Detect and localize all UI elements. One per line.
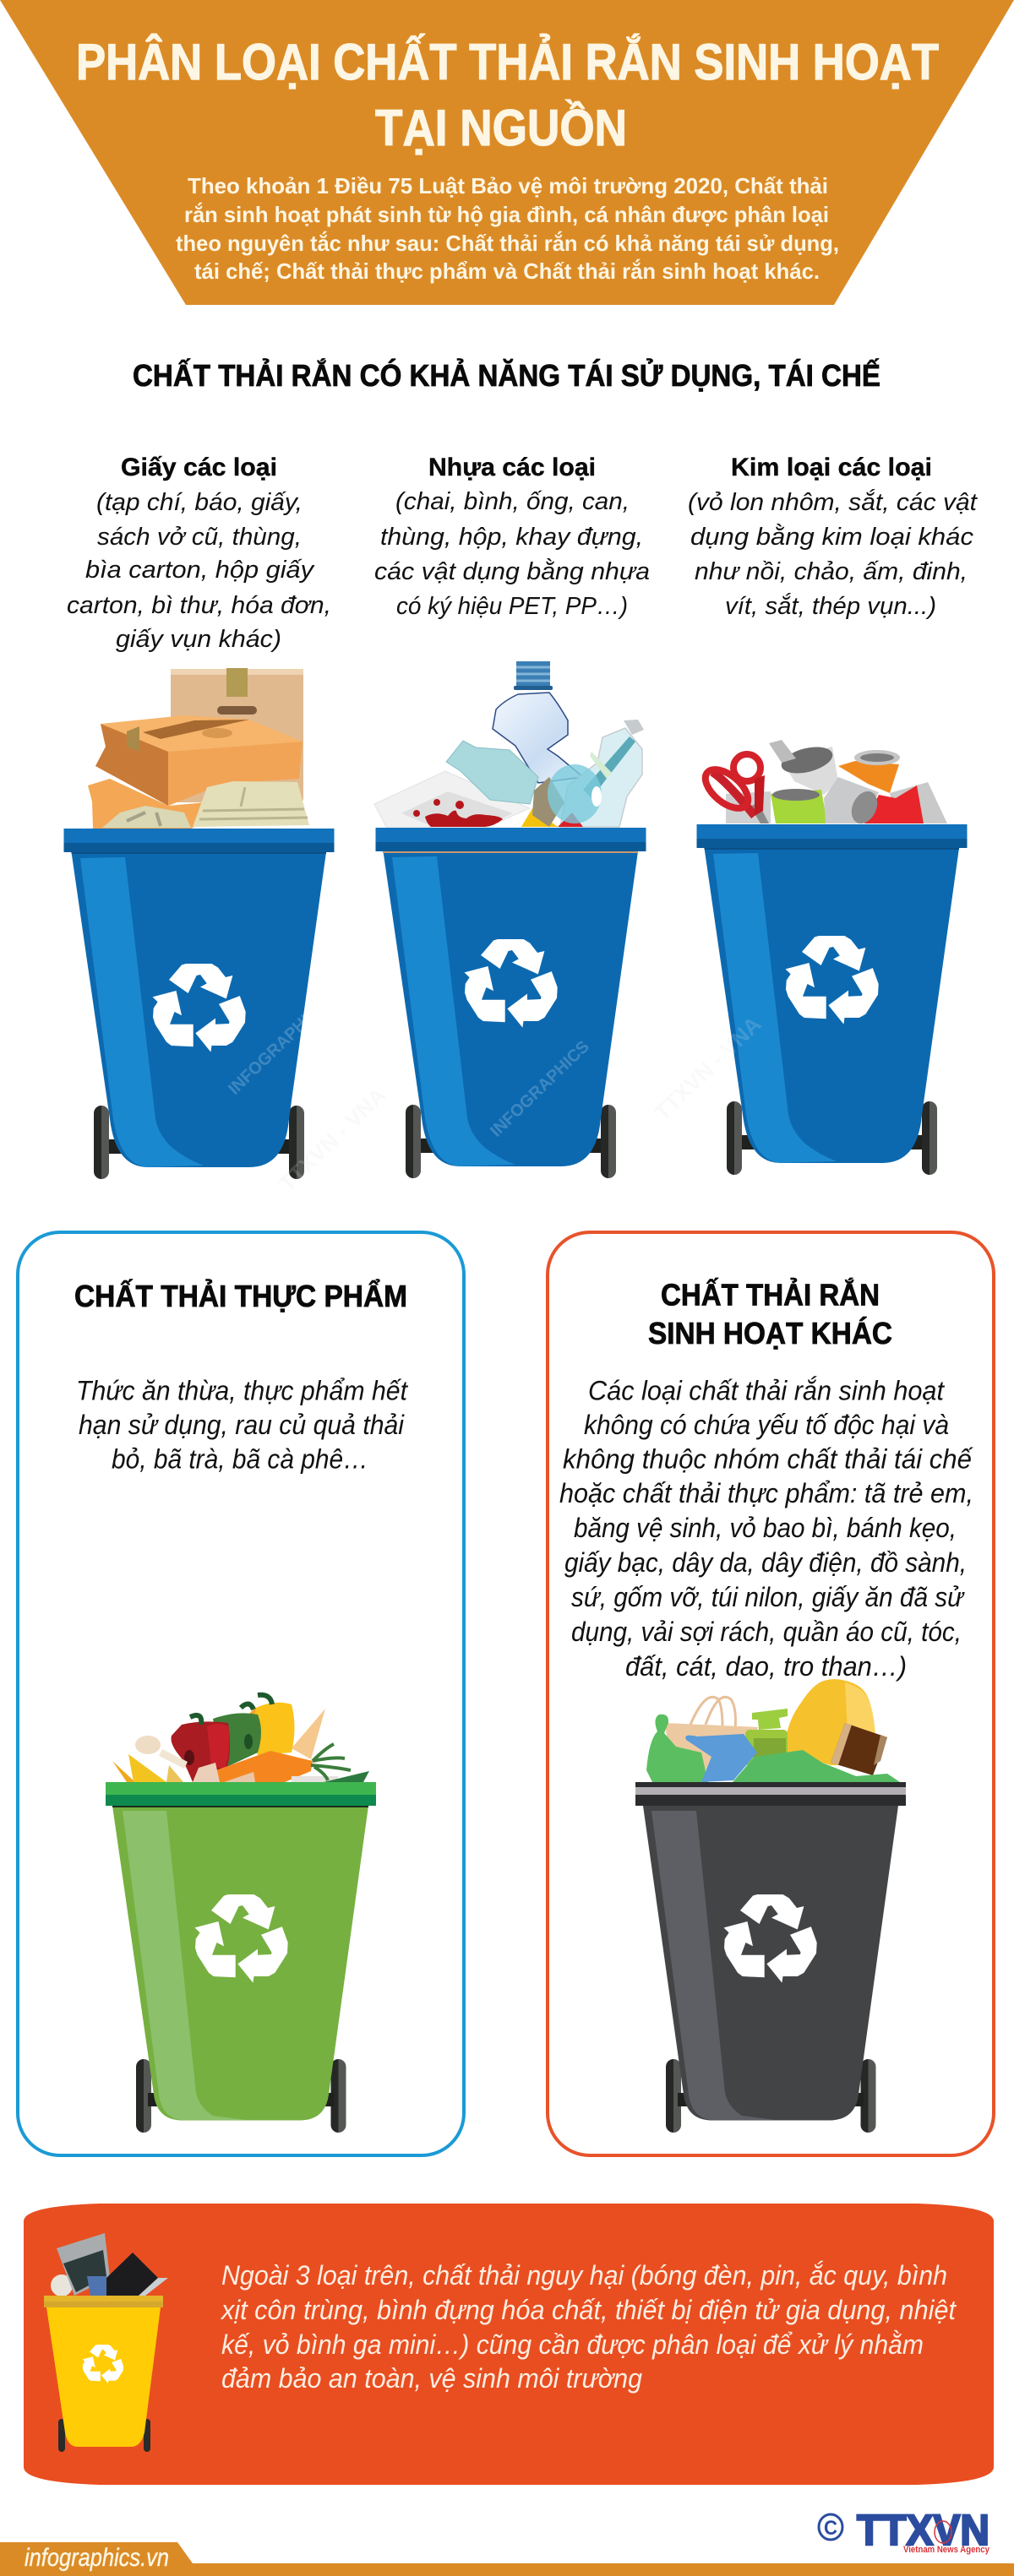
icon: mixed household waste [646, 1679, 900, 1782]
logo: TTXVN: Vietnam News Agency [903, 2545, 990, 2555]
text block: paper: (tạp chí, báo, giấy, [96, 489, 303, 516]
text block: metal: dụng bằng kim loại khác [690, 523, 974, 551]
text block: hazardous waste: Ngoài 3 loại trên, chất thải nguy hại (bóng đèn, pin, ắc quy, bình [221, 2260, 947, 2291]
text block: hazardous waste: xịt côn trùng, bình đựng hóa chất, thiết bị điện tử gia dụng, nhiệt [220, 2295, 957, 2325]
text block: paper: bìa carton, hộp giấy [85, 557, 315, 584]
text block: food waste: Thức ăn thừa, thực phẩm hết [76, 1375, 408, 1405]
intro paragraph: rắn sinh hoạt phát sinh từ hộ gia đình, cá nhân được phân loại [184, 202, 829, 227]
text block: food waste: hạn sử dụng, rau củ quả thải [79, 1410, 405, 1440]
icon: food scraps [112, 1695, 369, 1782]
text block: other solid waste: hoặc chất thải thực phẩm: tã trẻ em, [559, 1478, 973, 1508]
icon: recycle symbol [152, 964, 246, 1052]
icon: electronic waste [51, 2233, 168, 2296]
text block: plastic: có ký hiệu PET, PP…) [396, 593, 628, 620]
text block: plastic: thùng, hộp, khay đựng, [380, 524, 643, 551]
text block: other solid waste: băng vệ sinh, vỏ bao bì, bánh kẹo, [574, 1513, 957, 1543]
text block: other solid waste [559, 1375, 973, 1682]
icon: plastic waste pile [374, 661, 644, 827]
text block: metal: vít, sắt, thép vụn...) [725, 592, 936, 620]
text block: metal: Kim loại các loại [731, 454, 932, 481]
watermark: TTXVN - VNA [274, 1082, 391, 1196]
text block: metal [688, 454, 979, 620]
panel: hazardous waste [24, 2204, 994, 2485]
text block: paper: Giấy các loại [121, 454, 277, 481]
text block: plastic [374, 454, 650, 620]
heading: other solid waste: CHẤT THẢI RẮN [661, 1277, 880, 1312]
watermark: TTXVN - VNA [649, 1011, 766, 1125]
text block: other solid waste: không thuộc nhóm chất thải tái chế [563, 1444, 973, 1475]
footer site name: infographics.vn [25, 2544, 169, 2572]
text block: other solid waste: Các loại chất thải rắn sinh hoạt [588, 1375, 945, 1405]
footer bar [0, 2542, 1014, 2576]
bin: paper [64, 829, 335, 1179]
title [76, 34, 939, 156]
text block: plastic: (chai, bình, ống, can, [395, 488, 630, 515]
text block: other solid waste: sứ, gốm vỡ, túi nilon, giấy ăn đã sử [571, 1582, 966, 1612]
text block: other solid waste: dụng, vải sợi rách, quần áo cũ, tóc, [571, 1617, 962, 1647]
icon: metal waste pile [699, 740, 947, 828]
text block: metal: (vỏ lon nhôm, sắt, các vật [688, 488, 979, 516]
text block: other solid waste: không có chứa yếu tố độc hại và [584, 1410, 949, 1440]
bin: plastic: INFOGRAPHICS [487, 1037, 593, 1141]
text block: paper: carton, bì thư, hóa đơn, [67, 592, 331, 619]
icon: recycle symbol [723, 1894, 817, 1983]
text block: paper: sách vở cũ, thùng, [97, 524, 302, 551]
heading: food waste: CHẤT THẢI THỰC PHẨM [74, 1278, 407, 1313]
bin: metal [696, 824, 967, 1175]
intro paragraph: tái chế; Chất thải thực phẩm và Chất thải rắn sinh hoạt khác. [194, 258, 820, 284]
bin: hazardous waste, yellow [44, 2296, 163, 2452]
icon: recycle symbol [465, 939, 558, 1028]
bin: food waste, green [106, 1782, 376, 2133]
icon: recycle symbol [194, 1894, 288, 1983]
text block: food waste: bỏ, bã trà, bã cà phê… [112, 1444, 368, 1475]
title: TẠI NGUỒN [375, 100, 627, 156]
text block: hazardous waste: đảm bảo an toàn, vệ sinh môi trường [221, 2363, 642, 2394]
bin: other solid waste, black [635, 1782, 906, 2133]
panel: food waste [18, 1232, 464, 2155]
bin: paper: INFOGRAPHICS [225, 995, 331, 1099]
intro paragraph: theo nguyên tắc như sau: Chất thải rắn có khả năng tái sử dụng, [176, 231, 839, 256]
heading: other solid waste: SINH HOẠT KHÁC [648, 1316, 892, 1350]
logo: TTXVN: TTXVN [857, 2506, 989, 2554]
section heading: recyclable waste: CHẤT THẢI RẮN CÓ KHẢ NĂNG TÁI SỬ DỤNG, TÁI CHẾ [133, 357, 880, 393]
text block: plastic: các vật dụng bằng nhựa [374, 557, 650, 585]
intro paragraph: Theo khoản 1 Điều 75 Luật Bảo vệ môi trường 2020, Chất thải [188, 173, 828, 198]
intro paragraph [176, 173, 839, 284]
logo: TTXVN: C [824, 2517, 837, 2540]
panel: other solid waste [548, 1232, 994, 2155]
icon: recycle symbol [786, 936, 879, 1024]
text block: paper [67, 454, 331, 653]
text block: food waste [76, 1375, 408, 1475]
text block: hazardous waste [220, 2260, 957, 2394]
text block: other solid waste: giấy bạc, dây da, dây điện, đồ sành, [564, 1547, 967, 1578]
text block: metal: như nồi, chảo, ấm, đinh, [695, 558, 968, 585]
text block: other solid waste: đất, cát, dao, tro than…) [625, 1651, 907, 1682]
text block: paper: giấy vụn khác) [116, 626, 281, 653]
icon: paper waste pile [88, 668, 309, 829]
header banner [0, 0, 1014, 305]
bin: plastic [375, 828, 646, 1178]
text block: hazardous waste: kế, vỏ bình ga mini…) cũng cần được phân loại để xử lý nhằm [221, 2329, 924, 2360]
icon: recycle symbol [83, 2345, 123, 2383]
heading: other solid waste [648, 1277, 892, 1350]
text block: plastic: Nhựa các loại [428, 454, 596, 481]
